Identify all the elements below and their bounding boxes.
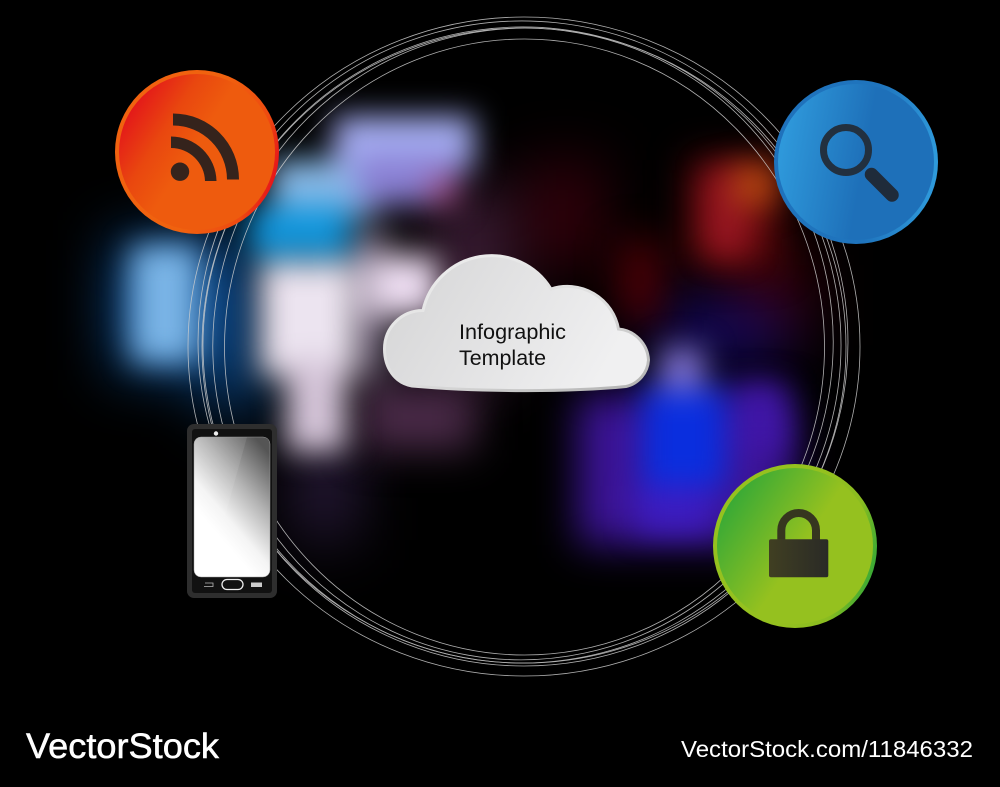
- camera: [214, 431, 218, 436]
- icon: RSS orange circle: [115, 70, 279, 234]
- cloud text: [459, 321, 566, 370]
- watermark: image id: VectorStock.com/11846332: [681, 736, 973, 762]
- cloud text: Infographic: [459, 321, 566, 344]
- icon: lock green circle: [713, 464, 877, 628]
- cloud text: Template: [459, 347, 546, 370]
- watermark: VectorStock logo: VectorStock: [26, 727, 220, 766]
- menu key: [251, 582, 262, 587]
- concentric sketch rings: [162, 0, 883, 709]
- screen: [194, 437, 270, 577]
- home button: [222, 580, 243, 590]
- icon: search blue circle: [774, 80, 938, 244]
- back key: [204, 583, 213, 586]
- smartphone: [187, 424, 277, 598]
- blurred world map: [115, 116, 810, 545]
- cloud: [384, 256, 648, 391]
